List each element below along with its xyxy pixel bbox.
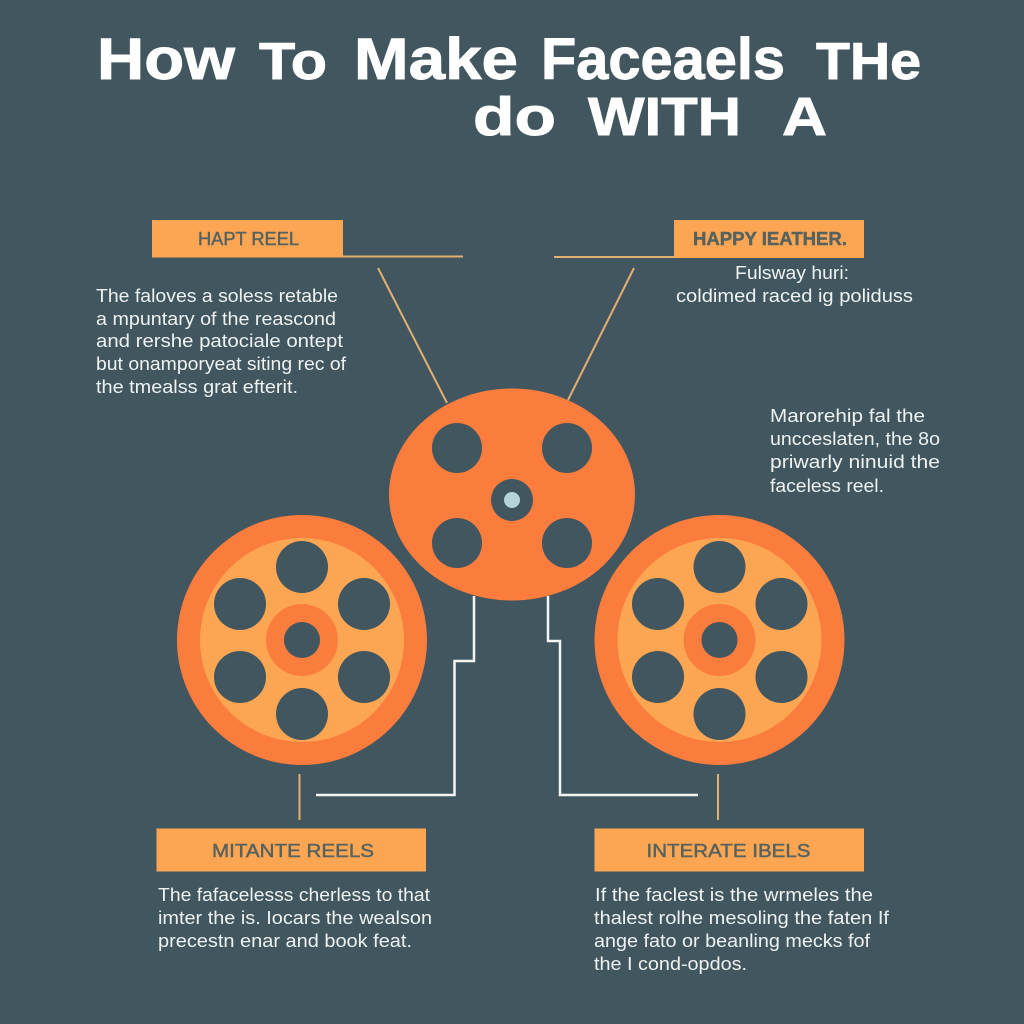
title: WITH xyxy=(588,87,741,147)
icon: right film reel xyxy=(594,515,844,765)
text block: top right description: Fulsway huri: xyxy=(735,263,849,283)
text block: middle right description: Marorehip fal the xyxy=(770,406,925,426)
text block: top left description: The faloves a soless retable xyxy=(96,286,338,306)
text block: top right description: coldimed raced ig poliduss xyxy=(676,286,913,306)
panel: top left label: HAPT REEL xyxy=(198,228,299,249)
panel: top left label xyxy=(152,220,343,258)
title xyxy=(97,27,921,147)
text block: middle right description: uncceslaten, the 8o xyxy=(770,429,940,449)
panel: bottom right label: INTERATE IBELS xyxy=(646,840,810,861)
title: To xyxy=(259,33,327,91)
text block: bottom left description xyxy=(158,885,432,951)
text block: bottom right description: If the faclest is the wrmeles the xyxy=(595,885,873,905)
text block: top left description: and rershe patociale ontept xyxy=(96,331,343,351)
title: Make xyxy=(354,27,518,92)
icon: center film reel xyxy=(389,388,635,600)
text block: bottom left description: The fafacelesss cherless to that xyxy=(158,885,430,905)
connector: bottom right white line xyxy=(548,596,698,795)
connector: top right tan lines xyxy=(554,257,674,400)
connector: right tan tick xyxy=(717,774,719,820)
title: A xyxy=(782,87,827,147)
text block: top left description xyxy=(96,286,347,397)
text block: bottom right description: ange fato or beanling mecks fof xyxy=(594,931,871,951)
text block: middle right description: faceless reel. xyxy=(770,476,884,496)
text block: top left description: a mpuntary of the reascond xyxy=(96,309,336,329)
text block: bottom right description: the I cond-opdos. xyxy=(594,954,747,974)
title: THe xyxy=(816,33,921,91)
text block: middle right description: priwarly ninuid the xyxy=(770,452,940,472)
text block: top left description: but onamporyeat siting rec of xyxy=(96,354,347,374)
connector: top left tan lines xyxy=(343,256,463,403)
text block: top left description: the tmealss grat efterit. xyxy=(96,377,298,397)
panel: bottom left label: MITANTE REELS xyxy=(212,840,374,861)
connector: left tan tick xyxy=(298,774,300,820)
text block: top right description xyxy=(676,263,913,306)
title: How xyxy=(97,27,236,92)
panel: top right label: HAPPY IEATHER. xyxy=(693,228,847,249)
text block: middle right description xyxy=(770,406,940,496)
text block: bottom right description xyxy=(594,885,890,974)
title: Faceaels xyxy=(541,27,785,92)
connector: bottom left white line xyxy=(316,596,474,795)
panel: top right label xyxy=(674,220,864,258)
title: do xyxy=(473,87,556,147)
text block: bottom left description: precestn enar and book feat. xyxy=(158,931,412,951)
text block: bottom left description: imter the is. Iocars the wealson xyxy=(158,908,432,928)
panel: bottom right label xyxy=(594,828,864,872)
panel: bottom left label xyxy=(156,828,426,872)
text block: bottom right description: thalest rolhe mesoling the faten If xyxy=(594,908,890,928)
icon: left film reel xyxy=(177,515,427,765)
